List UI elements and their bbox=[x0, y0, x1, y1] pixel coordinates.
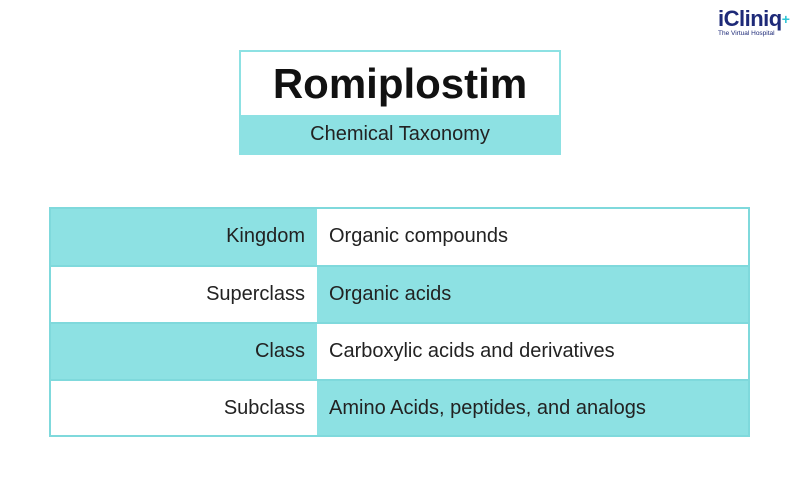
row: kingdom: Organic compounds bbox=[329, 225, 508, 247]
row: class bbox=[50, 322, 749, 379]
row: kingdom bbox=[51, 209, 508, 265]
title: Romiplostim bbox=[273, 60, 527, 106]
row: class: Carboxylic acids and derivatives bbox=[329, 340, 615, 362]
row: superclass bbox=[50, 265, 749, 322]
logo: The Virtual Hospital bbox=[718, 30, 775, 37]
row: kingdom: Kingdom bbox=[226, 225, 305, 247]
title box bbox=[239, 50, 561, 155]
row: subclass: Amino Acids, peptides, and analogs bbox=[329, 397, 646, 419]
row: class: Class bbox=[255, 340, 305, 362]
row: subclass bbox=[50, 379, 749, 436]
row: subclass: Subclass bbox=[224, 397, 305, 419]
row: superclass: Organic acids bbox=[329, 283, 451, 305]
subtitle bbox=[241, 115, 559, 153]
row: superclass: Superclass bbox=[206, 283, 305, 305]
subtitle: Chemical Taxonomy bbox=[310, 122, 490, 144]
logo: iCliniq+ bbox=[718, 6, 789, 31]
